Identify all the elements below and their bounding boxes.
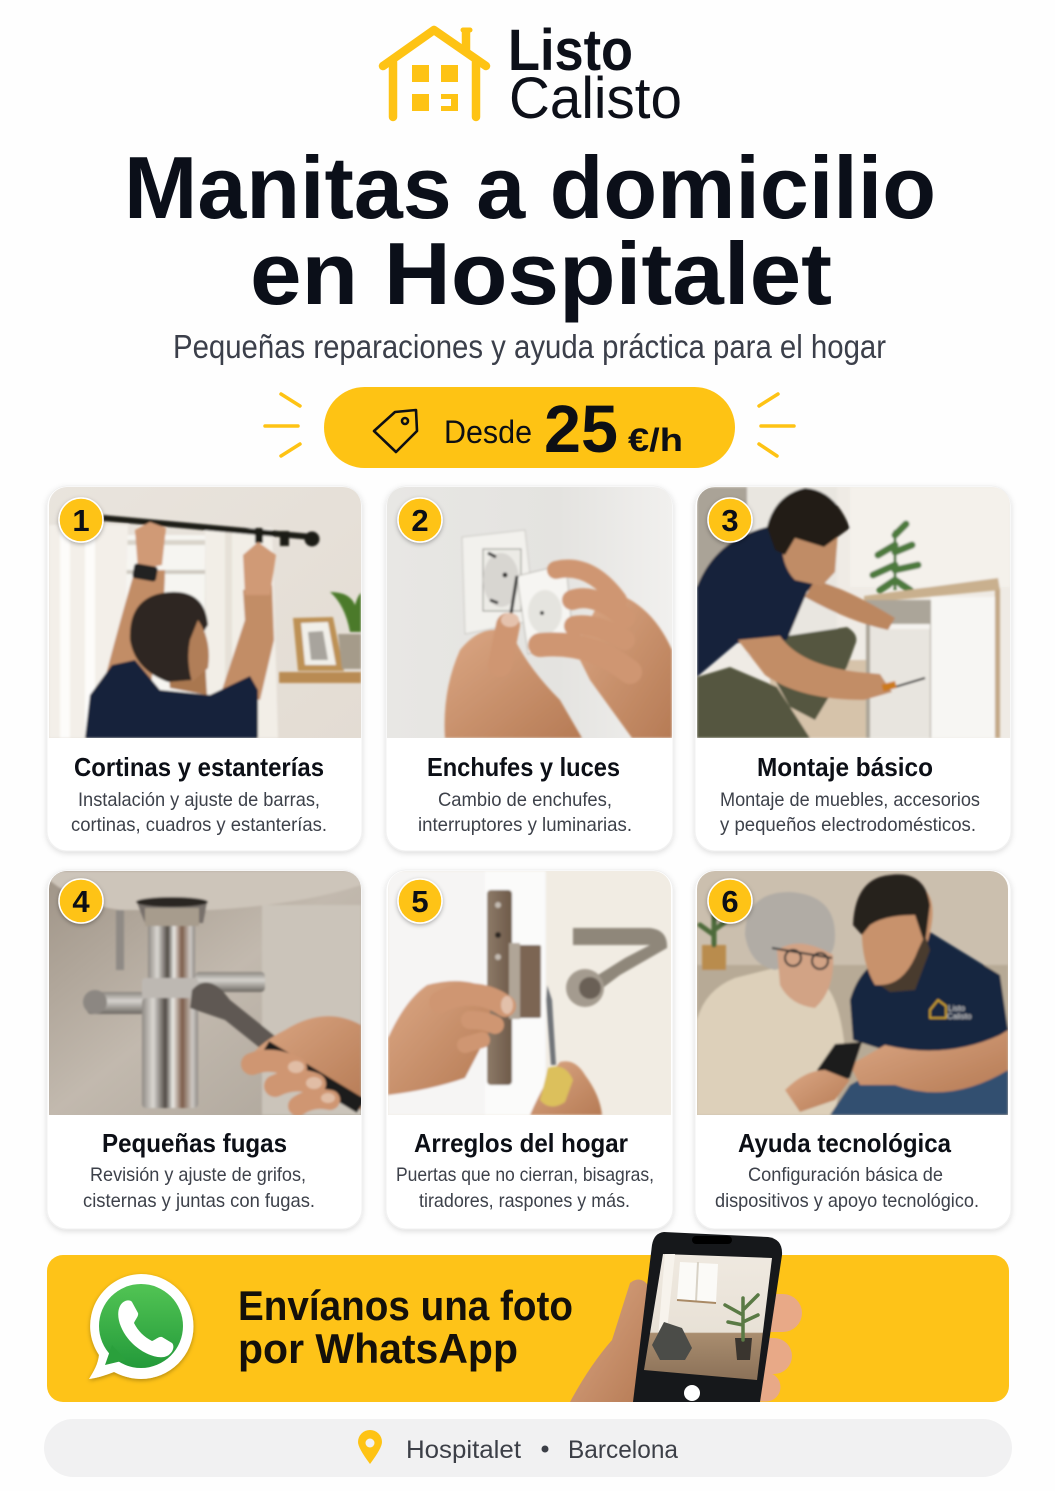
price callout [265,387,794,468]
card title: Enchufes y luces [427,752,620,782]
price text: Desde [444,414,532,450]
photo: technician helping woman with phone [697,871,1008,1115]
price text: 25 [544,392,618,467]
card description [71,789,327,836]
photo: technician helping woman with phone: Calisto [947,1012,972,1021]
price rays right [759,394,794,456]
banner text [238,1282,573,1372]
badge 4 [59,879,103,923]
card description [720,789,980,836]
card title: Arreglos del hogar [414,1128,628,1158]
card background [386,486,673,851]
card title: Montaje básico [757,752,933,782]
icon: location pin [358,1430,382,1464]
card description: cortinas, cuadros y estanterías. [71,814,327,836]
card description: cisternas y juntas con fugas. [83,1190,315,1212]
photo: man assembling furniture [697,487,1010,738]
price text: €/h [628,422,683,458]
panel: enchufes y luces [386,486,673,851]
badge 2 [398,498,442,542]
card description [83,1164,315,1212]
icon: house [383,30,486,117]
badge 4: 4 [72,884,90,919]
title: en Hospitalet [250,224,832,323]
card description: dispositivos y apoyo tecnológico. [715,1190,979,1212]
card description: Puertas que no cierran, bisagras, [396,1164,654,1186]
badge 6 [708,879,752,923]
logo: Listo Calisto [383,18,682,131]
card description: interruptores y luminarias. [418,814,632,836]
photo: hands changing a socket [387,487,672,738]
badge 3 [708,498,752,542]
logo wordmark: Listo [508,18,633,83]
card description: y pequeños electrodomésticos. [720,814,976,836]
footer pill [44,1419,1012,1477]
panel: cortinas y estanterías [47,486,362,851]
panel: ayuda tecnológica [695,870,1011,1229]
badge 1 [59,498,103,542]
hand holding phone [570,1232,783,1402]
card description: Montaje de muebles, accesorios [720,789,980,811]
card background [47,486,362,851]
badge 5 [398,879,442,923]
badge 1: 1 [72,503,90,538]
photo: wrench on chrome siphon [49,871,361,1115]
card description: tiradores, raspones y más. [419,1190,630,1212]
badge 5: 5 [411,884,429,919]
card background [47,870,362,1229]
card description: Cambio de enchufes, [438,789,612,811]
icon: price tag [374,410,417,452]
icon: whatsapp [89,1274,194,1379]
card description: Configuración básica de [748,1164,943,1186]
card title: Cortinas y estanterías [74,752,324,782]
panel: arreglos del hogar [386,870,673,1229]
title: Manitas a domicilio [124,138,936,237]
card title: Pequeñas fugas [102,1128,287,1158]
location text [406,1436,678,1464]
panel: montaje básico [695,486,1011,851]
card background [386,870,673,1229]
whatsapp banner [47,1232,1009,1402]
price pill [324,387,735,468]
logo wordmark [508,18,682,131]
badge 3: 3 [721,503,739,538]
card description [418,789,632,836]
title [124,138,936,323]
card background [695,486,1011,851]
banner text: por WhatsApp [238,1325,518,1372]
logo wordmark: Calisto [509,66,682,131]
panel: pequeñas fugas [47,870,362,1229]
card background [695,870,1011,1229]
subtitle: Pequeñas reparaciones y ayuda práctica para el hogar [173,328,886,365]
badge 2: 2 [411,503,429,538]
location text: Barcelona [568,1436,678,1464]
price rays left [265,394,300,456]
badge 6: 6 [721,884,739,919]
card title: Ayuda tecnológica [738,1128,951,1158]
location text: Hospitalet [406,1436,521,1464]
photo: technician helping woman with phone: Listo [948,1004,965,1013]
card description [715,1164,979,1212]
photo: man installing curtain rod [49,487,361,738]
banner background [47,1255,1009,1402]
photo: hinge and door handle repair [388,871,671,1115]
card description: Instalación y ajuste de barras, [78,789,320,811]
banner text: Envíanos una foto [238,1282,573,1329]
price text [444,392,683,467]
card description: Revisión y ajuste de grifos, [90,1164,306,1186]
card description [396,1164,654,1212]
location footer [44,1419,1012,1477]
